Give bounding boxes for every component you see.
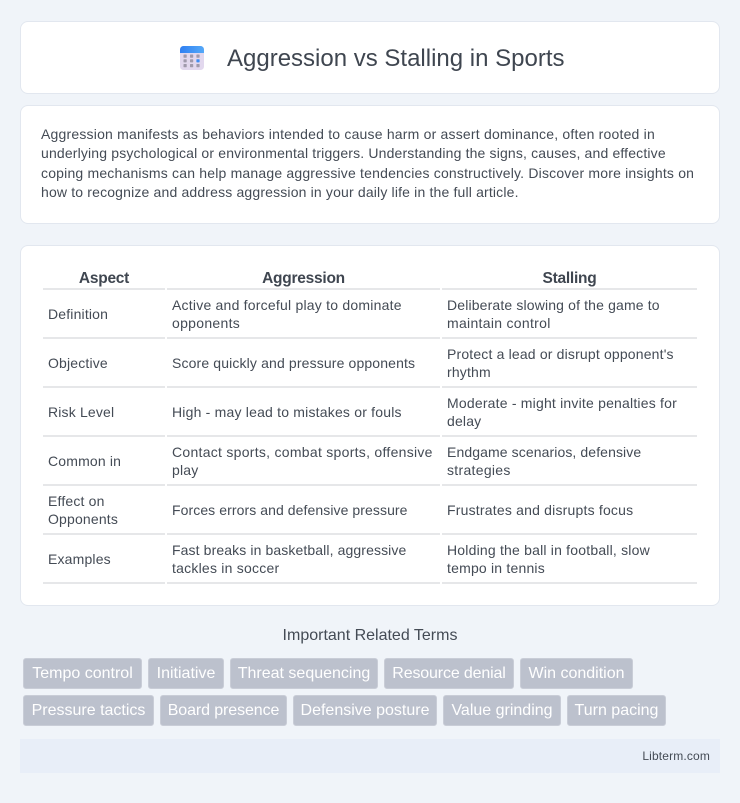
footer bbox=[20, 739, 720, 773]
column headers: Aspect bbox=[79, 270, 129, 287]
comparison table: tempo in tennis bbox=[447, 560, 545, 576]
comparison table: Forces errors and defensive pressure bbox=[172, 502, 408, 518]
comparison table: Active and forceful play to dominate bbox=[172, 297, 402, 313]
intro text: underlying psychological or environmental triggers. Understanding the signs, causes, and effective bbox=[41, 145, 666, 161]
comparison table: Score quickly and pressure opponents bbox=[172, 355, 415, 371]
intro text bbox=[41, 126, 694, 200]
footer credit: Libterm.com bbox=[642, 749, 710, 763]
intro text: Aggression manifests as behaviors intended to cause harm or assert dominance, often rooted in bbox=[41, 126, 655, 142]
comparison table: Risk Level bbox=[48, 404, 114, 420]
related term tags: Defensive posture bbox=[301, 702, 429, 719]
related term tags: Pressure tactics bbox=[32, 702, 145, 719]
column headers: Stalling bbox=[542, 270, 596, 287]
comparison table: opponents bbox=[172, 315, 240, 331]
title: Aggression vs Stalling in Sports bbox=[227, 45, 564, 72]
related term tags bbox=[23, 658, 666, 726]
intro text: coping mechanisms can help manage aggressive tendencies constructively. Discover more insights on bbox=[41, 165, 694, 181]
intro card bbox=[20, 105, 720, 224]
comparison table: rhythm bbox=[447, 364, 491, 380]
related term tags: Threat sequencing bbox=[238, 665, 370, 682]
related terms heading: Important Related Terms bbox=[283, 627, 457, 644]
comparison table: Frustrates and disrupts focus bbox=[447, 502, 633, 518]
column headers bbox=[79, 270, 596, 287]
related term tags: Board presence bbox=[168, 702, 279, 719]
comparison table: Objective bbox=[48, 355, 108, 371]
comparison table: strategies bbox=[447, 462, 511, 478]
comparison table: delay bbox=[447, 413, 481, 429]
comparison table: maintain control bbox=[447, 315, 551, 331]
icon: calendar bbox=[180, 46, 204, 70]
related term tags: Tempo control bbox=[32, 665, 133, 682]
comparison table: Definition bbox=[48, 306, 108, 322]
related term tags: Resource denial bbox=[392, 665, 506, 682]
related term tags: Initiative bbox=[157, 665, 215, 682]
header card bbox=[20, 21, 720, 94]
comparison table: Contact sports, combat sports, offensive bbox=[172, 444, 433, 460]
related term tags: Turn pacing bbox=[575, 702, 658, 719]
comparison table: tackles in soccer bbox=[172, 560, 279, 576]
comparison table: Opponents bbox=[48, 511, 118, 527]
comparison table: Endgame scenarios, defensive bbox=[447, 444, 641, 460]
related term tags: Win condition bbox=[528, 665, 625, 682]
comparison table: Examples bbox=[48, 551, 111, 567]
comparison table: Effect on bbox=[48, 493, 105, 509]
comparison table: Moderate - might invite penalties for bbox=[447, 395, 677, 411]
related term tags: Value grinding bbox=[451, 702, 553, 719]
comparison table: Protect a lead or disrupt opponent's bbox=[447, 346, 674, 362]
comparison table: Fast breaks in basketball, aggressive bbox=[172, 542, 406, 558]
column headers: Aggression bbox=[262, 270, 345, 287]
comparison table: Deliberate slowing of the game to bbox=[447, 297, 660, 313]
comparison table: Holding the ball in football, slow bbox=[447, 542, 650, 558]
table card bbox=[20, 245, 720, 606]
comparison table: play bbox=[172, 462, 198, 478]
comparison table: High - may lead to mistakes or fouls bbox=[172, 404, 402, 420]
comparison table bbox=[43, 270, 697, 584]
comparison table: Common in bbox=[48, 453, 121, 469]
intro text: how to recognize and address aggression in your daily life in the full article. bbox=[41, 184, 519, 200]
